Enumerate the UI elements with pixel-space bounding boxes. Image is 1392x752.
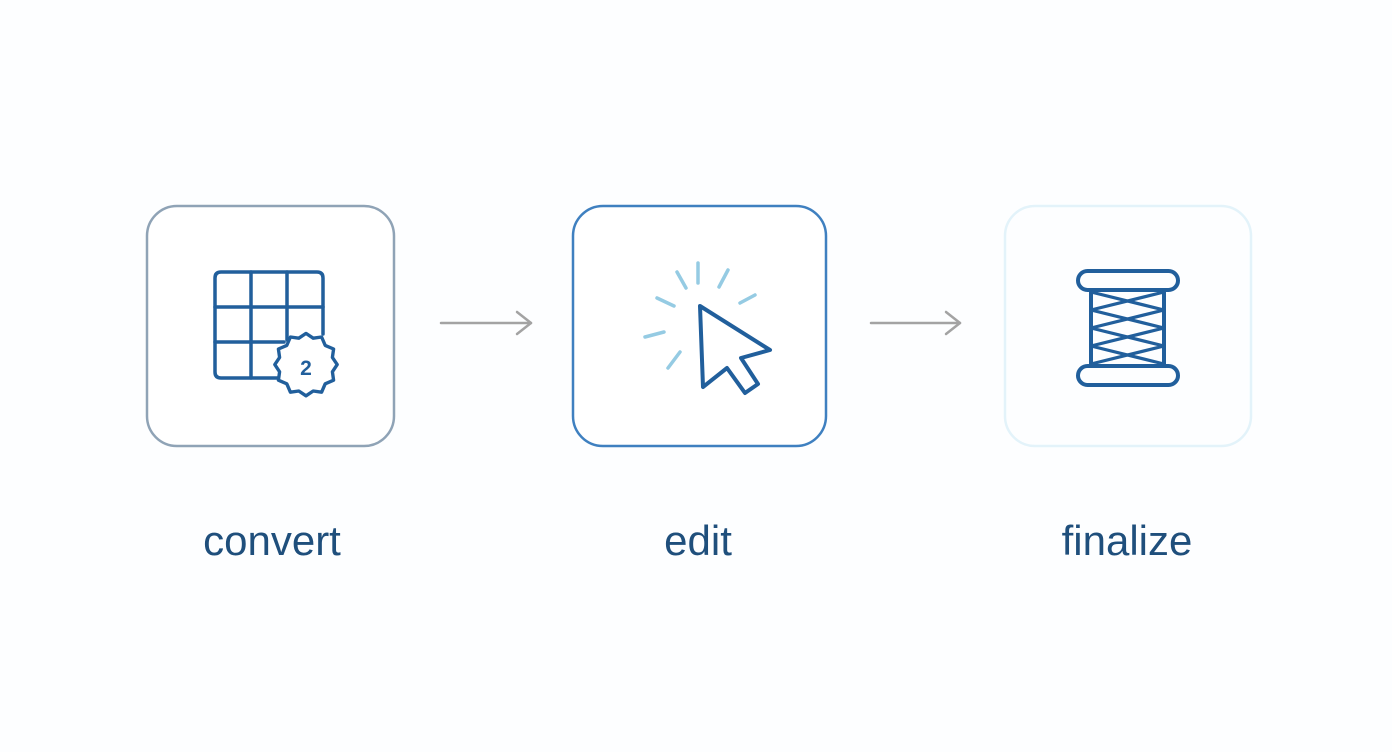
panel: convert box — [147, 206, 394, 446]
label: edit: edit — [664, 517, 732, 564]
step: finalize — [1005, 206, 1251, 564]
icon: grid with badge — [215, 272, 337, 396]
label: convert: convert — [203, 517, 341, 564]
arrow 2 — [871, 312, 960, 334]
arrow 1 — [441, 312, 531, 334]
step: convert: 2 — [300, 357, 312, 380]
label: finalize: finalize — [1062, 517, 1192, 564]
icon: cursor with click rays — [645, 263, 770, 393]
panel: finalize box — [1005, 206, 1251, 446]
panel: edit box — [573, 206, 826, 446]
step: edit — [573, 206, 826, 564]
step: convert — [147, 206, 394, 564]
icon: spool — [1078, 271, 1178, 385]
